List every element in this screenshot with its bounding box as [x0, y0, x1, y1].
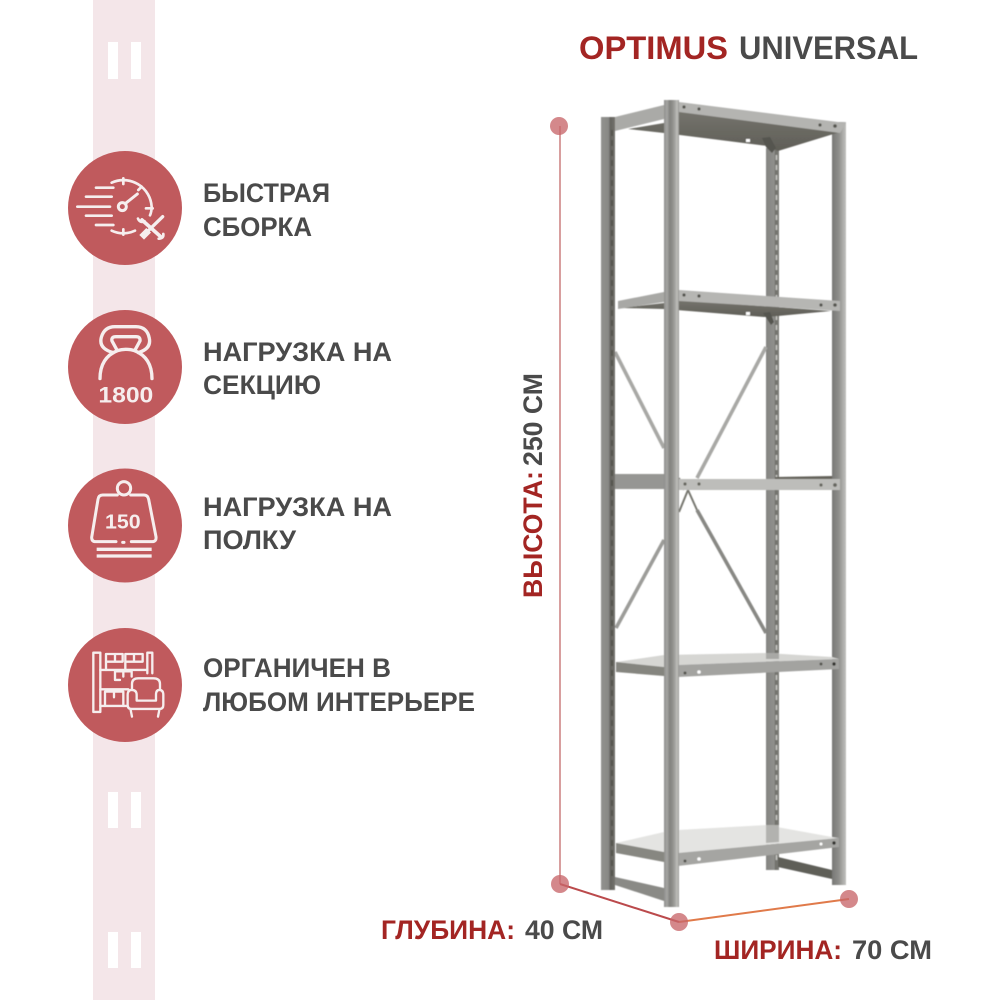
fifth shelf — [616, 825, 839, 866]
width label: ШИРИНА: — [714, 935, 842, 965]
width label: 70 СМ — [852, 935, 932, 965]
dimension lines — [560, 126, 849, 922]
feature text: fits any interior: ОРГАНИЧЕН В — [203, 653, 391, 683]
back right post — [766, 148, 779, 870]
fourth shelf — [616, 653, 839, 677]
dimension markers — [550, 117, 858, 931]
left post — [601, 117, 615, 890]
feature text: fast assembly: БЫСТРАЯ — [203, 178, 330, 208]
height label — [518, 373, 548, 598]
feature text: fits any interior: ЛЮБОМ ИНТЕРЬЕРЕ — [203, 687, 475, 717]
feature text: section load: СЕКЦИЮ — [203, 370, 321, 400]
front bottom rail — [615, 877, 664, 901]
third shelf — [612, 474, 840, 490]
icon: weight 150 — [68, 468, 182, 582]
icon: shelving and armchair — [68, 628, 182, 742]
feature text: fits any interior — [203, 653, 475, 717]
width label — [714, 935, 932, 965]
depth label: ГЛУБИНА: — [381, 915, 515, 945]
icon: fast assembly — [68, 151, 182, 265]
feature text: shelf load — [203, 492, 392, 555]
cross braces — [615, 347, 766, 633]
feature text: fast assembly: СБОРКА — [203, 212, 312, 242]
right post — [832, 122, 846, 885]
decorative band — [93, 0, 155, 1000]
depth label — [381, 915, 603, 945]
back bottom rail — [778, 857, 832, 879]
icon: kettlebell 1800: 1800 — [98, 382, 153, 407]
height label: ВЫСОТА: — [518, 471, 548, 598]
shelving unit — [601, 100, 846, 907]
title: OPTIMUS — [579, 30, 728, 66]
depth label: 40 СМ — [525, 915, 603, 945]
top shelf — [615, 100, 846, 153]
feature text: section load: НАГРУЗКА НА — [203, 337, 392, 367]
title — [579, 30, 918, 66]
feature text: section load — [203, 337, 392, 400]
feature text: shelf load: ПОЛКУ — [203, 525, 297, 555]
height label: 250 СМ — [518, 373, 548, 466]
icon: weight 150: 150 — [105, 511, 141, 533]
second shelf — [618, 290, 840, 325]
icon: kettlebell 1800 — [68, 310, 182, 424]
feature text: fast assembly — [203, 178, 330, 242]
title: UNIVERSAL — [739, 30, 918, 66]
feature text: shelf load: НАГРУЗКА НА — [203, 492, 392, 522]
front centre post — [664, 100, 679, 907]
